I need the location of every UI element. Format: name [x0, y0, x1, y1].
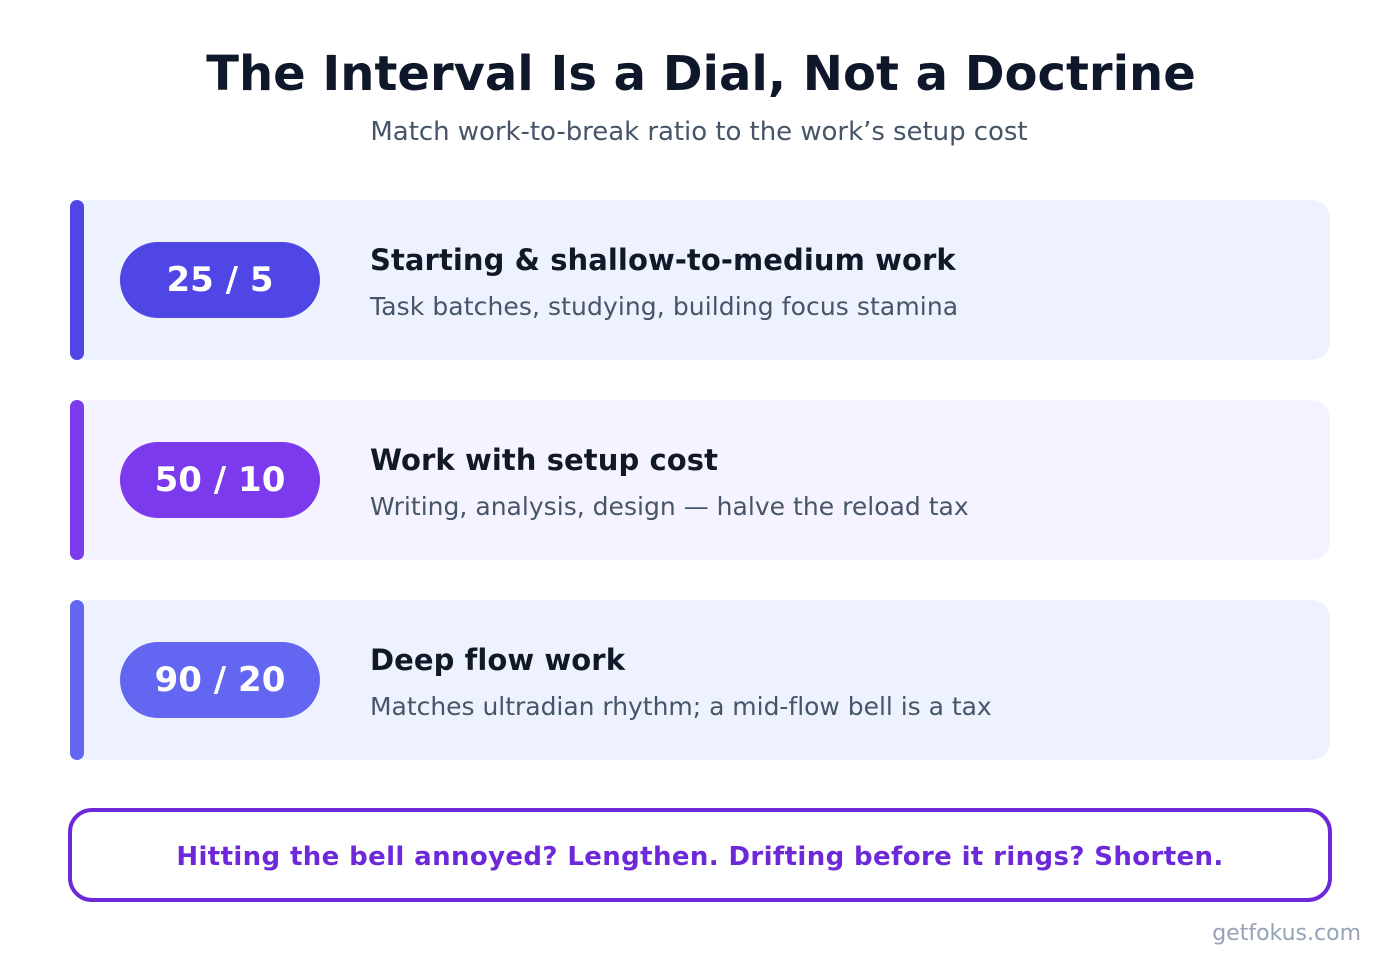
ratio pill: 90 / 20 — [155, 660, 285, 700]
callout: Hitting the bell annoyed? Lengthen. Drifting before it rings? Shorten. — [176, 842, 1224, 872]
subtitle: Match work-to-break ratio to the work’s setup cost — [370, 117, 1028, 147]
ratio pill — [120, 242, 320, 318]
ratio pill: 25 / 5 — [166, 260, 274, 300]
accent bar — [70, 600, 84, 760]
ratio pill — [120, 442, 320, 518]
title: The Interval Is a Dial, Not a Doctrine — [206, 46, 1196, 102]
description: Task batches, studying, building focus stamina — [370, 292, 958, 321]
accent bar — [70, 400, 84, 560]
description: Writing, analysis, design — halve the reload tax — [370, 492, 969, 521]
panel: 90 / 20 — [70, 600, 1330, 760]
panel: 50 / 10 — [70, 400, 1330, 560]
panel: 25 / 5 — [70, 200, 1330, 360]
heading: Work with setup cost — [370, 443, 718, 477]
heading: Starting & shallow-to-medium work — [370, 243, 956, 277]
description: Matches ultradian rhythm; a mid-flow bell is a tax — [370, 692, 992, 721]
footer brand: getfokus.com — [1212, 921, 1361, 946]
accent bar — [70, 200, 84, 360]
callout — [68, 808, 1332, 902]
heading: Deep flow work — [370, 643, 625, 677]
ratio pill — [120, 642, 320, 718]
ratio pill: 50 / 10 — [155, 460, 285, 500]
